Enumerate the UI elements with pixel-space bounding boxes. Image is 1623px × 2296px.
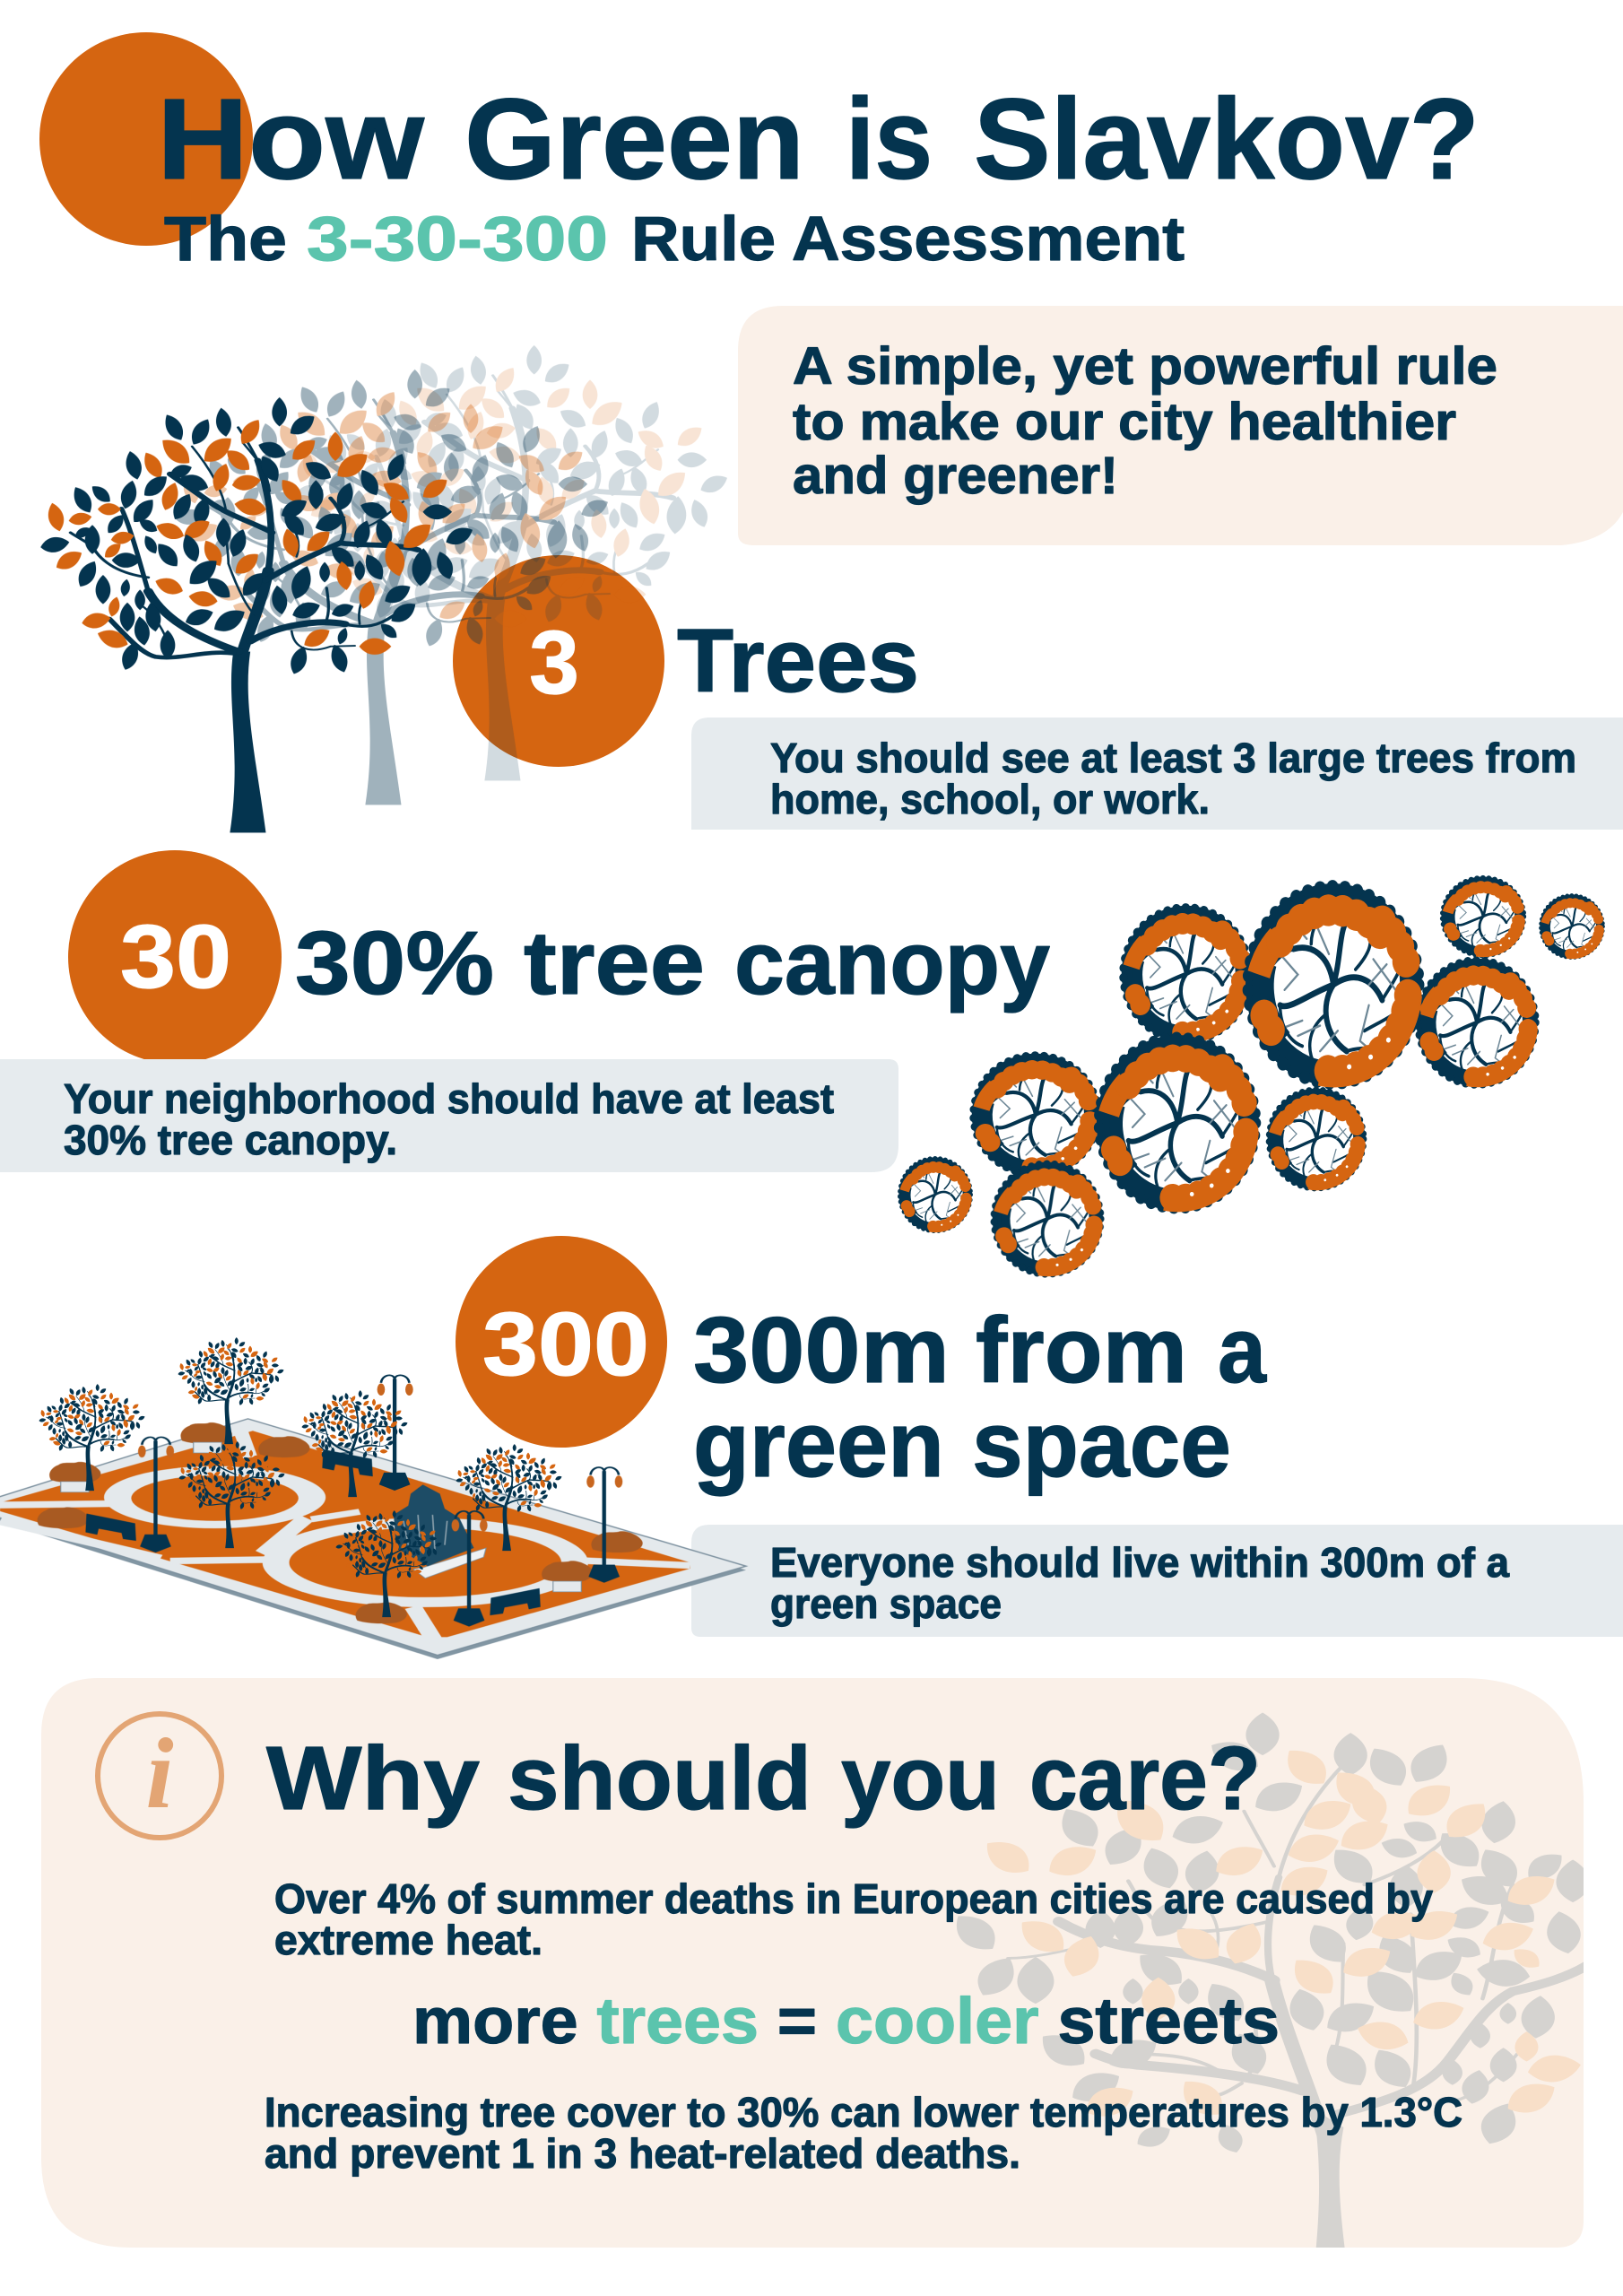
heading: 30% tree canopy	[295, 913, 1050, 1013]
badge: 300	[456, 1236, 667, 1448]
title: Green	[464, 75, 804, 204]
intro text	[793, 337, 1497, 505]
illustration: three trees	[39, 345, 730, 832]
heading: 300m from a green space: a	[1218, 1299, 1267, 1403]
panel: canopy rule: Your neighborhood should have at least	[64, 1075, 834, 1122]
subtitle	[164, 204, 1185, 274]
intro text: to make our city healthier	[793, 393, 1456, 451]
intro text: A simple, yet powerful rule	[793, 337, 1497, 396]
statistic text: Over 4% of summer deaths in European cities are caused by	[274, 1875, 1433, 1922]
panel: intro callout	[738, 306, 1623, 546]
panel: trees rule: You should see at least 3 large trees from	[770, 735, 1576, 781]
badge number 300: 300	[482, 1294, 649, 1395]
panel: green space rule	[691, 1525, 1623, 1637]
heading: 30% tree canopy: tree	[524, 913, 705, 1013]
benefit text: and prevent 1 in 3 heat-related deaths.	[265, 2130, 1020, 2177]
heading: 300m from a green space	[693, 1299, 1267, 1497]
badge number 30: 30	[120, 907, 231, 1007]
panel: trees rule: home, school, or work.	[770, 776, 1210, 822]
title: is	[846, 75, 933, 204]
panel: canopy rule: 30% tree canopy.	[64, 1117, 397, 1163]
icon: info	[98, 1714, 221, 1838]
heading: why should you care: Why	[266, 1728, 480, 1829]
heading: 30% tree canopy: canopy	[734, 913, 1050, 1013]
panel: canopy rule	[0, 1059, 898, 1172]
subtitle: Rule Assessment	[631, 204, 1185, 274]
statistic text	[274, 1875, 1433, 1963]
badge number 3: 3	[529, 613, 579, 713]
intro text: and greener!	[793, 447, 1118, 505]
statistic text: extreme heat.	[274, 1917, 542, 1963]
panel: trees rule	[691, 718, 1623, 830]
panel: green space rule: green space	[770, 1580, 1002, 1627]
title	[157, 75, 1480, 204]
heading: why should you care: should	[508, 1728, 812, 1829]
badge: 3	[453, 555, 664, 767]
heading: 300m from a green space: green	[693, 1393, 944, 1497]
heading: why should you care	[266, 1728, 1261, 1829]
illustration: isometric park	[0, 1337, 746, 1659]
background tree	[945, 1713, 1590, 2250]
heading: why should you care: care?	[1029, 1728, 1261, 1829]
heading: 300m from a green space: from	[976, 1299, 1187, 1403]
panel: why should you care	[41, 1678, 1590, 2250]
heading: 300m from a green space: space	[972, 1393, 1231, 1497]
equation: more trees = cooler streets: more trees = cooler streets	[412, 1986, 1280, 2057]
title: How	[157, 75, 424, 204]
benefit text	[265, 2089, 1462, 2177]
subtitle: The	[164, 204, 287, 274]
title circle	[39, 32, 253, 246]
heading: Trees: Trees	[677, 611, 919, 711]
benefit text: Increasing tree cover to 30% can lower temperatures by 1.3°C	[265, 2089, 1462, 2135]
subtitle: 3-30-300	[307, 204, 608, 274]
illustration: tree canopies from above	[900, 878, 1603, 1274]
heading: why should you care: you	[841, 1728, 1000, 1829]
panel: green space rule: Everyone should live within 300m of a	[770, 1539, 1509, 1586]
badge: 30	[68, 850, 282, 1064]
heading: 30% tree canopy: 30%	[295, 913, 494, 1013]
heading: 300m from a green space: 300m	[693, 1299, 950, 1403]
icon: info: i	[145, 1718, 174, 1830]
title: Slavkov?	[974, 75, 1480, 204]
